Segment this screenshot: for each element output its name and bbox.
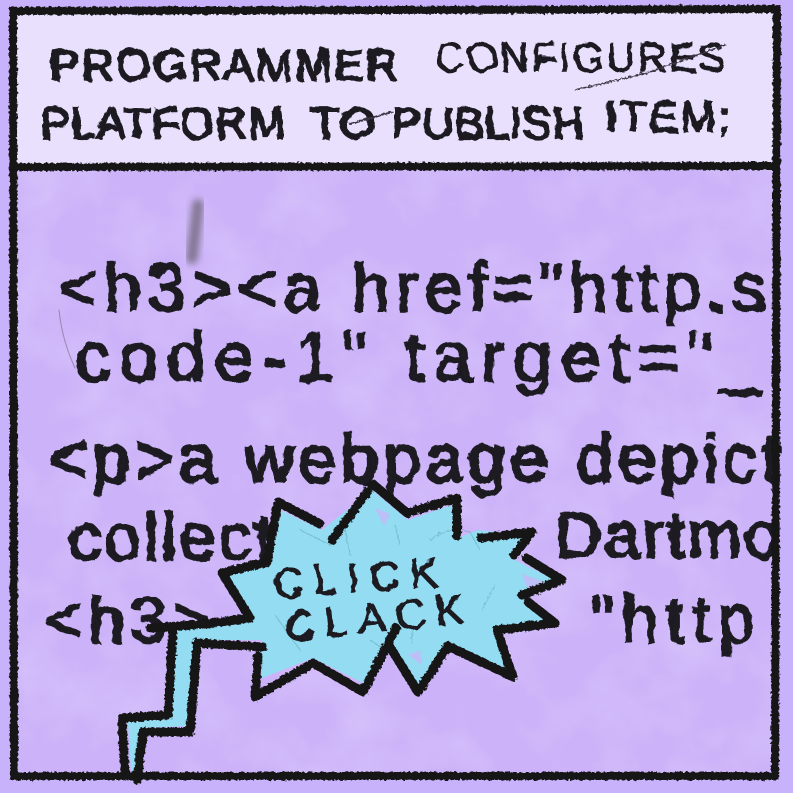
text block: handwritten code: code-1" target="_	[75, 318, 761, 396]
burst label: CLICK	[271, 549, 439, 607]
burst fill	[128, 490, 555, 785]
heading: caption text: ITEM;	[606, 93, 730, 140]
text block: handwritten code: "http	[590, 582, 755, 656]
heading: caption text: PUBLISH	[392, 99, 584, 148]
heading: caption text	[40, 36, 730, 148]
text block: handwritten code	[45, 250, 780, 656]
burst and tail outline	[122, 484, 562, 780]
text block: handwritten code: collect	[68, 500, 273, 574]
panel: code body background	[14, 166, 774, 776]
icon: click clack burst with lightning tail	[122, 484, 562, 785]
panel: caption box	[14, 12, 776, 166]
heading: caption text: PLATFORM	[40, 99, 285, 148]
burst faint ghost marks	[275, 525, 495, 650]
caption pen strokes	[350, 45, 725, 124]
text block: handwritten code: Dartmo	[555, 499, 780, 571]
heading: caption text: CONFIGURES	[435, 36, 725, 80]
text block: handwritten code: <h3>	[45, 584, 210, 656]
text block: handwritten code: <p>a webpage depict	[48, 421, 780, 497]
heading: caption text: PROGRAMMER	[50, 41, 398, 90]
heading: caption text: TO	[310, 99, 376, 148]
text block: handwritten code: <h3><a href="http.s	[58, 250, 766, 326]
burst label: CLACK	[282, 585, 466, 651]
burst label	[271, 549, 466, 651]
smudge	[59, 205, 198, 368]
burst pink gaps	[375, 508, 545, 665]
